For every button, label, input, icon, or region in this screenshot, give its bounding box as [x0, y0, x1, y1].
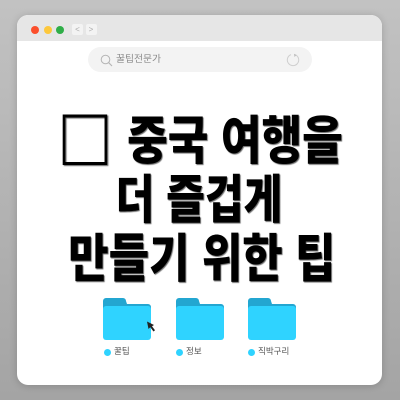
title box glyph: □ — [57, 91, 113, 181]
folder: 정보 — [176, 298, 224, 340]
icon: reload — [286, 54, 300, 66]
title bar — [17, 15, 382, 41]
title line 3: 만들기 위한 팁 — [68, 216, 335, 292]
title — [57, 91, 343, 292]
label: 정보: 정보 — [186, 346, 202, 356]
back button — [72, 24, 83, 35]
icon: search — [100, 54, 112, 66]
window control: minimise — [44, 26, 52, 34]
title line 1: 중국 여행을 — [127, 99, 343, 174]
forward button: > — [89, 25, 93, 34]
search bar — [88, 47, 312, 72]
legend dot: 꿀팁 — [104, 348, 111, 356]
folder: 직박구리 — [248, 298, 296, 340]
search text: 꿀팁전문가 — [116, 54, 161, 65]
forward button — [86, 24, 96, 35]
label: 꿀팁: 꿀팁 — [114, 346, 130, 356]
legend dot: 정보 — [176, 348, 183, 356]
back button: < — [75, 25, 80, 34]
window control: close — [31, 26, 39, 34]
folder: 꿀팁 — [103, 298, 151, 340]
window control: maximise — [56, 26, 64, 34]
icon: mouse cursor — [147, 322, 155, 332]
title line 2: 더 즐겁게 — [115, 158, 282, 232]
label: 직박구리: 직박구리 — [258, 346, 289, 356]
legend dot: 직박구리 — [248, 348, 255, 356]
